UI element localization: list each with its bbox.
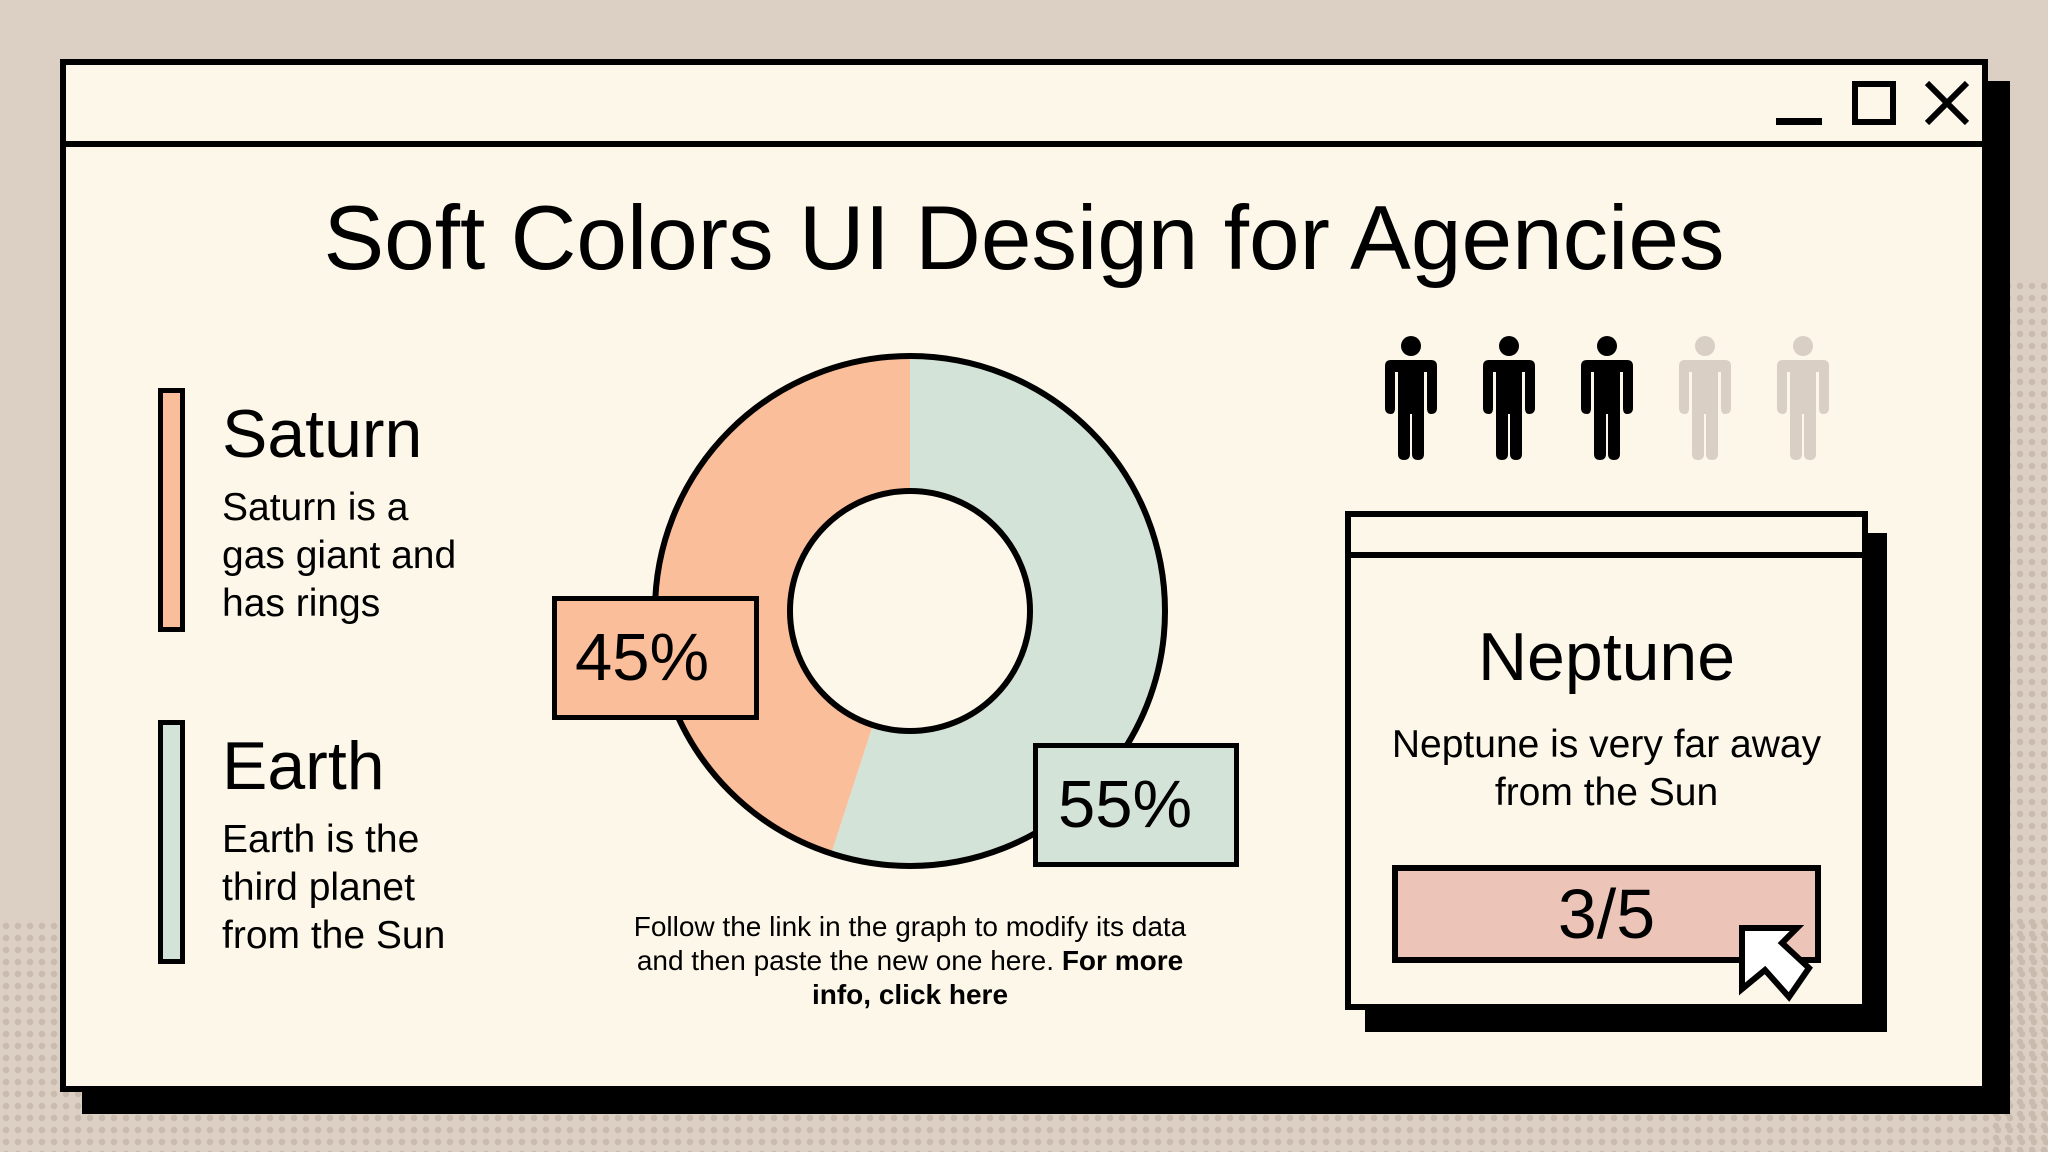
panel: Earth — [158, 720, 445, 964]
icon: cursor — [1739, 925, 1813, 1002]
window controls — [1776, 81, 1970, 125]
card frame — [1345, 511, 1868, 1010]
icon: close — [1924, 81, 1970, 125]
label: 55%: 55% — [1058, 767, 1192, 842]
button: 3/5: 3/5 — [1558, 875, 1655, 953]
text: Saturn: Saturn is a gas giant and has rings — [222, 486, 456, 625]
text: Neptune: from the Sun — [1495, 771, 1718, 814]
panel: Saturn — [158, 388, 456, 632]
title bar — [66, 65, 1982, 147]
title: Soft Colors UI Design for Agencies — [323, 188, 1725, 289]
heading: Neptune: Neptune — [1478, 619, 1735, 695]
label: 45% — [552, 596, 759, 720]
caption: Follow the link in the graph to modify its data and then paste the new one here. For more info, click here — [634, 911, 1186, 1010]
heading: Saturn: Saturn — [222, 396, 422, 472]
icon: maximize — [1852, 81, 1896, 125]
text: Neptune — [1392, 723, 1821, 814]
label: 55% — [1033, 743, 1239, 867]
label: 45%: 45% — [575, 620, 709, 695]
icon: minimize — [1776, 118, 1822, 125]
text: Neptune: Neptune is very far away — [1392, 723, 1821, 766]
icon: people 3 of 5 — [1385, 336, 1829, 460]
card shadow — [1365, 533, 1887, 1032]
color bar: Saturn — [158, 388, 185, 632]
button: 3/5 — [1392, 865, 1821, 963]
donut chart — [652, 353, 1168, 869]
segment: Earth 55% — [831, 356, 1165, 866]
segment: Saturn 45% — [655, 356, 910, 854]
color bar: Earth — [158, 720, 185, 964]
heading: Earth: Earth — [222, 728, 385, 804]
panel: Neptune card — [1345, 511, 1887, 1032]
text: Earth: Earth is the third planet from the Sun — [222, 818, 445, 957]
